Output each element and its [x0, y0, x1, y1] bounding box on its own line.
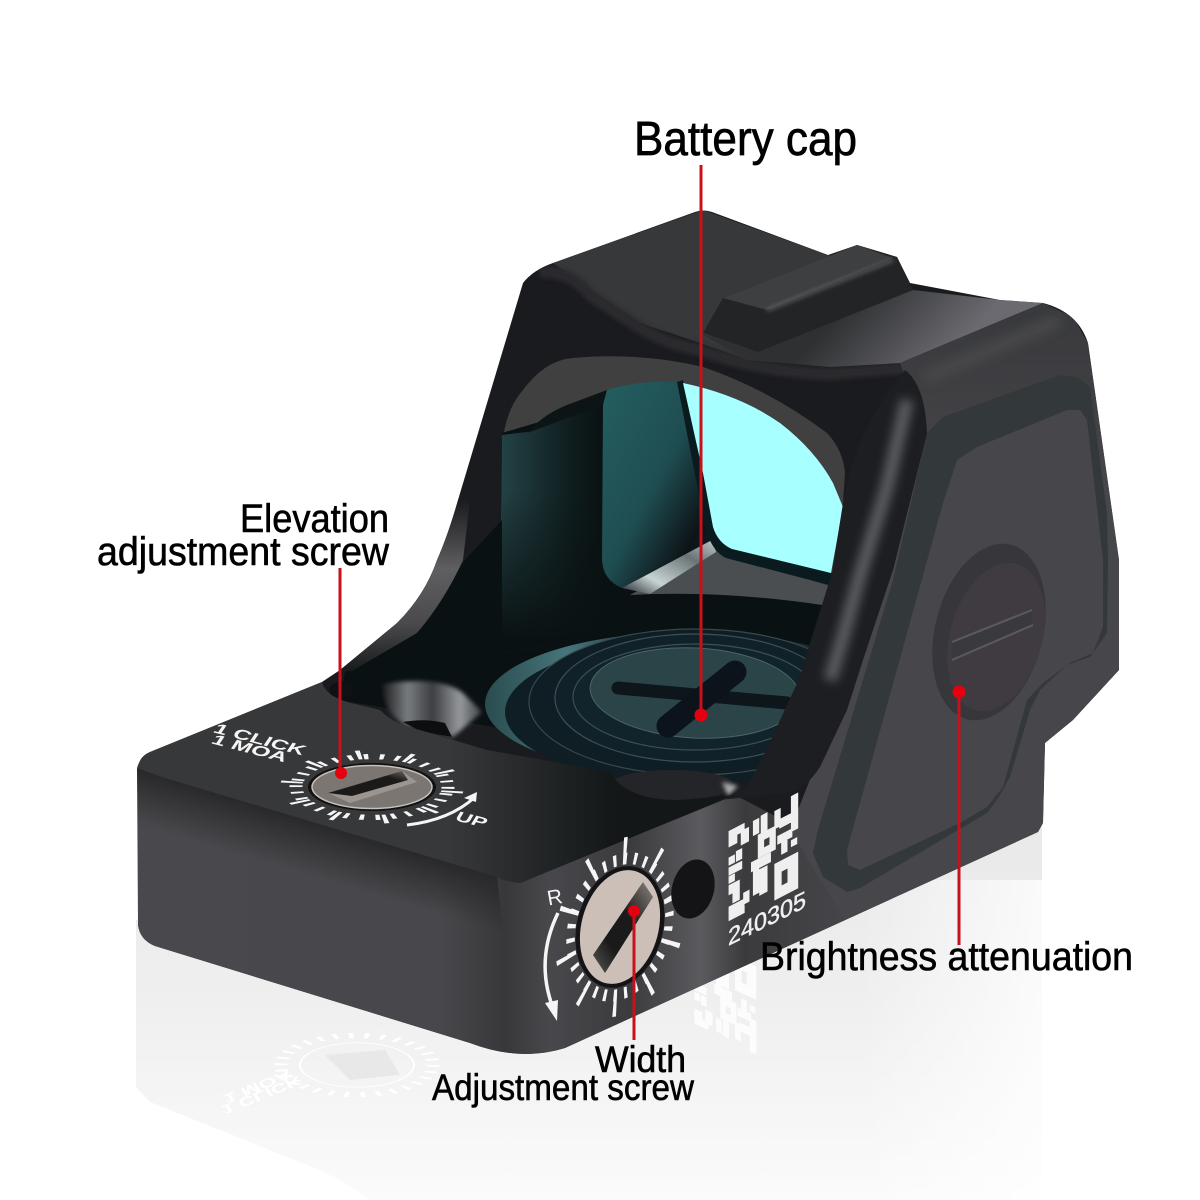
UP label: UP — [452, 809, 491, 831]
reflected click label: 1 CLICK — [218, 1073, 304, 1116]
reflected dial — [281, 1035, 433, 1095]
front corner pillar — [720, 370, 927, 800]
label: elevation adjustment screw: adjustment screw — [97, 530, 389, 574]
dial slot — [952, 610, 1032, 660]
screw rim — [562, 856, 678, 998]
screw rim and face — [308, 763, 436, 811]
ledge under lens — [630, 548, 828, 605]
cap face — [590, 647, 796, 739]
window frame — [500, 356, 845, 660]
up arrow — [407, 797, 475, 825]
right screw hole — [610, 770, 738, 800]
ticks — [282, 751, 462, 823]
label: width adjustment screw — [432, 1039, 694, 1108]
front faces — [137, 768, 845, 1054]
rear sight block — [703, 245, 913, 352]
leader: elevation — [335, 568, 347, 779]
outer ring — [485, 636, 810, 752]
label: elevation adjustment screw: Elevation — [240, 497, 389, 541]
heading: battery cap: Battery cap — [634, 113, 857, 166]
small slot notch — [329, 682, 353, 698]
leader: battery cap — [694, 165, 708, 722]
interior floor — [340, 403, 828, 780]
interior teal wall — [602, 382, 714, 590]
side recess band — [813, 375, 1108, 892]
R label: R — [545, 885, 564, 910]
label: width adjustment screw: Width — [595, 1039, 686, 1080]
screw face — [568, 861, 672, 993]
interior left teal wall — [502, 390, 607, 652]
left screw hole — [383, 681, 482, 737]
concave edge shine — [340, 500, 470, 671]
1 click label: 1 CLICK — [210, 721, 309, 759]
sight body silhouette — [138, 210, 1119, 1054]
corner shine — [622, 540, 716, 594]
screw slot — [593, 882, 653, 973]
pillar highlight — [830, 400, 907, 680]
side body — [790, 303, 1119, 920]
label: width adjustment screw: Adjustment screw — [432, 1067, 694, 1108]
serial number: 240305 — [728, 886, 806, 952]
label: elevation adjustment screw — [97, 497, 389, 574]
ridge — [540, 272, 905, 374]
1 MOA label: 1 MOA — [208, 732, 291, 765]
QR code — [729, 794, 797, 923]
base top surface — [137, 682, 735, 883]
width dial — [545, 838, 691, 1021]
leader: brightness — [952, 686, 966, 945]
label: brightness attenuation: Brightness attenuation — [760, 935, 1133, 979]
leader: width — [628, 905, 640, 1040]
side hole — [665, 855, 721, 923]
screw slot — [328, 771, 417, 803]
side dial face — [931, 551, 1061, 723]
hood surfaces — [540, 210, 1043, 374]
cyan lens — [683, 383, 843, 573]
side dial rim — [932, 544, 1046, 720]
lens edge — [677, 380, 832, 585]
front top shadow — [137, 768, 505, 945]
reflected moa label: 1 MOA — [220, 1066, 294, 1105]
side inner panel — [847, 410, 1103, 870]
ticks — [549, 838, 691, 1016]
plateau — [553, 210, 910, 367]
cross slot — [618, 688, 787, 703]
rotate arrow — [545, 913, 558, 1008]
rim highlight — [925, 320, 1060, 378]
reflected QR code — [695, 939, 756, 1053]
battery cap — [485, 628, 810, 782]
reflection below the sight — [136, 800, 1042, 1200]
elevation dial — [208, 721, 491, 831]
right plateau — [700, 290, 1043, 367]
